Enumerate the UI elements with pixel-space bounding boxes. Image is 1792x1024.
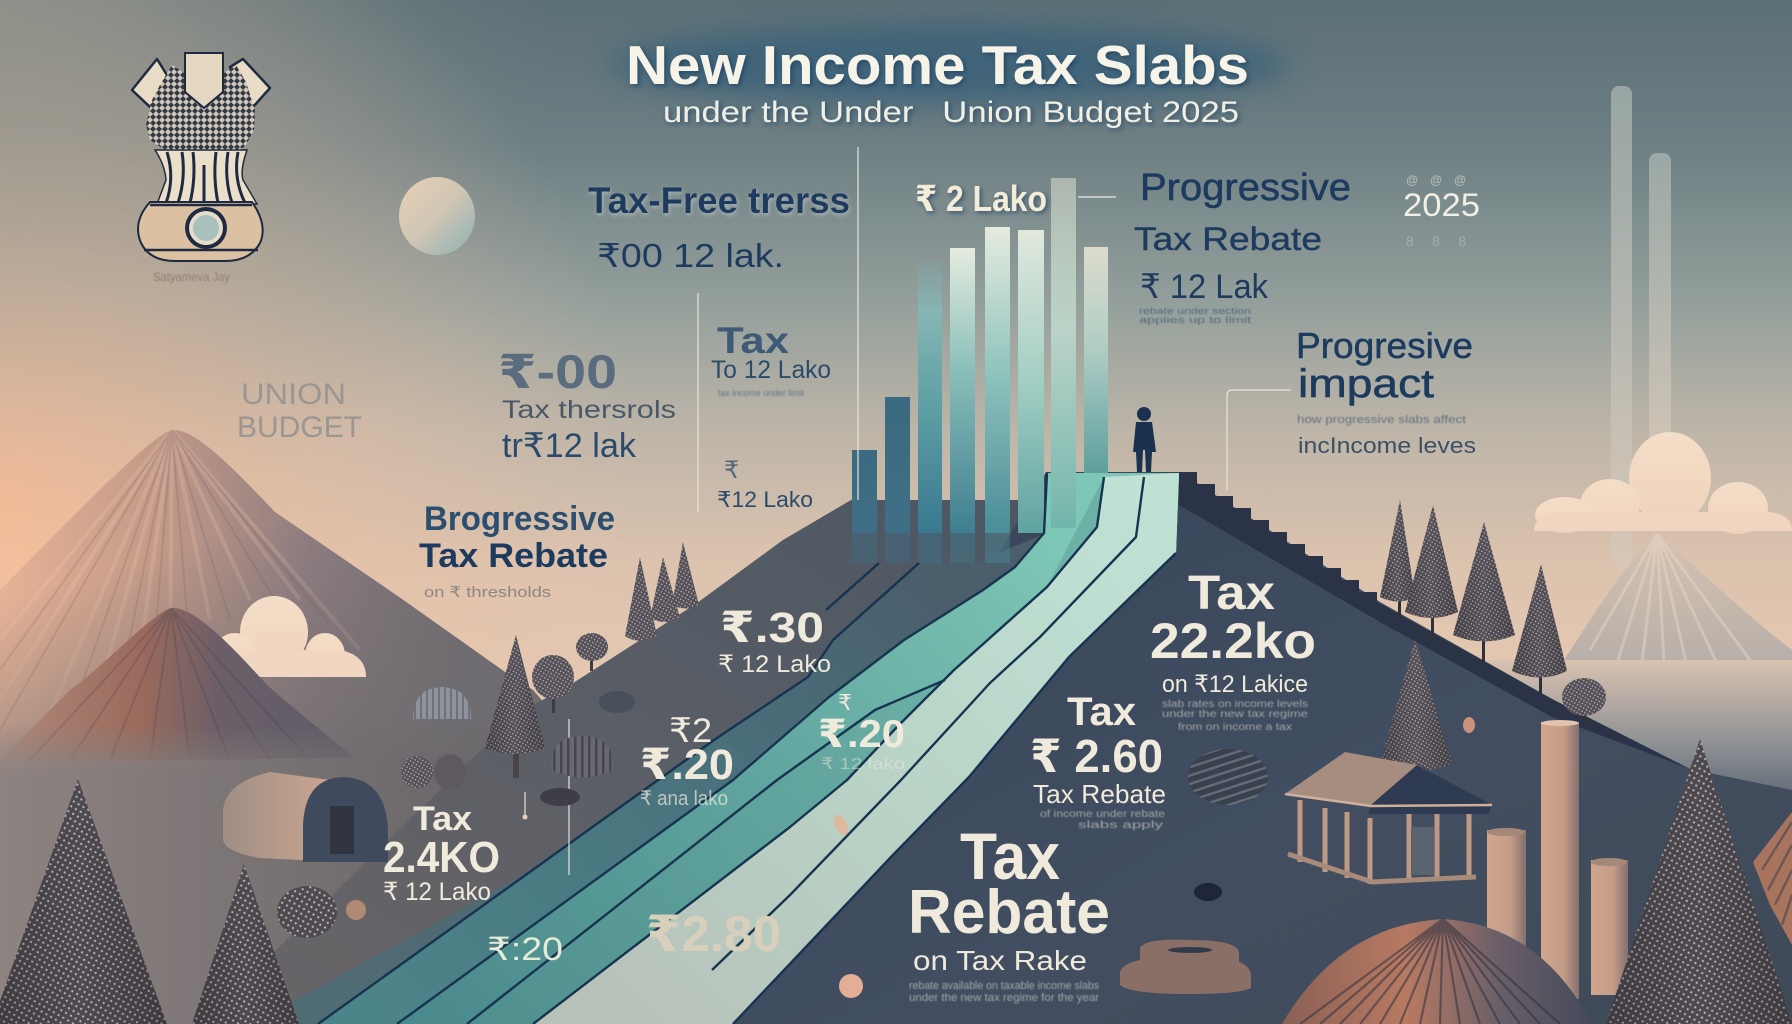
hill label: tax rebate large: rebate available on taxable income slabs: [909, 980, 1099, 992]
cones, house and columns right side: [1120, 500, 1792, 1024]
round bush: [1562, 678, 1606, 722]
ramp label: 2 / 20: ₹2: [669, 712, 712, 750]
hill label: tax rebate large: [908, 819, 1110, 1004]
callout: progressive tax rebate right: ₹ 12 Lak: [1140, 268, 1269, 306]
hill label: tax 22.2ko: from on income a tax: [1178, 722, 1292, 733]
ramp label: 20 right: [818, 690, 905, 773]
staircase on hill ridge: [1179, 472, 1690, 769]
callout: tax-free threshold: Tax-Free trerss: [588, 180, 850, 221]
callout: progressive tax rebate right: [1134, 167, 1351, 325]
tall column: [1541, 720, 1579, 999]
tree 3: [1453, 522, 1515, 662]
callout: tax thresholds: Tax thersrols: [502, 396, 676, 424]
title glow: [610, 25, 1290, 105]
callout: progressive tax rebate right: Tax Rebate: [1134, 221, 1322, 257]
emblem caption: Satyameva Jay: [153, 270, 230, 284]
callout: progressive tax rebate left: Tax Rebate: [419, 537, 608, 575]
hill label: tax 2.60: [1030, 690, 1166, 831]
ground label: tax 2.4ko: Tax: [413, 800, 472, 838]
tax slab ramp: [265, 473, 1179, 1024]
hill label: tax rebate large: Rebate: [908, 878, 1110, 947]
callout: tax to 12 lakh: ₹: [724, 457, 739, 484]
callout: tax-free threshold: ₹00 12 lak.: [597, 237, 784, 274]
bar 7: [1051, 178, 1076, 528]
callout: top bar label: ₹ 2 Lako: [915, 178, 1047, 219]
ball on ramp: [839, 974, 863, 998]
tree cluster upper: [625, 542, 699, 641]
person standing on platform: [1133, 407, 1156, 472]
big right cone: [1606, 739, 1792, 1024]
striped ball: [1188, 749, 1268, 805]
hill label: tax 2.60: slabs apply: [1078, 820, 1163, 831]
medium column: [1487, 828, 1526, 955]
callout: progressive tax rebate left: Brogressive: [424, 500, 615, 538]
ramp label: 2 / 20: ₹.20: [640, 741, 734, 789]
cloud left: [213, 596, 366, 677]
tree 2: [1405, 505, 1458, 642]
callout: tax thresholds: [498, 345, 676, 465]
tree 1: [1380, 500, 1415, 618]
short column: [1591, 858, 1628, 995]
tall cone tree: [485, 635, 545, 778]
big left mountain: [0, 430, 620, 790]
second left cone: [192, 864, 299, 1024]
small ornament: [1194, 883, 1222, 901]
union budget label: [237, 378, 362, 444]
tree 4: [1512, 564, 1567, 694]
stone disc: [1120, 940, 1251, 994]
callout: progressive impact: how progressive slabs affect: [1297, 414, 1466, 426]
ramp band pale: [533, 473, 1179, 1024]
hill label: tax 22.2ko: Tax: [1188, 567, 1275, 620]
year label: 8 8 8: [1406, 233, 1466, 249]
round bushes: [413, 633, 635, 719]
hill label: tax 2.60: ₹ 2.60: [1030, 730, 1163, 782]
hill label: tax rebate large: under the new tax regime for the year: [909, 992, 1099, 1004]
ground label: tax 2.4ko: [383, 800, 500, 906]
callout: progressive impact: incIncome leves: [1298, 433, 1476, 458]
ramp dark lane lines: [318, 473, 1176, 1024]
callout: progressive impact: [1296, 325, 1476, 458]
callout: tax thresholds: ₹-00: [498, 345, 617, 398]
hill label: tax 22.2ko: [1150, 567, 1316, 733]
dome: [1282, 919, 1592, 1024]
left hill slope: [200, 500, 1060, 1024]
callout: progressive tax rebate left: on ₹ thresholds: [424, 584, 551, 601]
ramp label: 2 / 20: ₹ ana lako: [640, 788, 728, 810]
bar 3: [918, 262, 942, 533]
tunnel: [223, 772, 388, 862]
hill label: tax rebate large: on Tax Rake: [913, 945, 1087, 976]
cones and trees left side: [0, 542, 863, 1024]
ramp label: 30: ₹.30: [720, 604, 824, 652]
ramp label: 30: [718, 604, 831, 678]
striped cone edge right: [1753, 812, 1792, 945]
ramp band slate: [265, 473, 1179, 1024]
callout leader lines: [525, 147, 1291, 875]
ground label: tax 2.4ko: 2.4KO: [383, 833, 500, 882]
hill label: tax rebate large: Tax: [960, 819, 1060, 893]
sphere: [399, 177, 475, 255]
ramp label: 20 right: ₹.20: [818, 713, 905, 756]
ramp label: bottom 20: ₹:20: [487, 931, 563, 967]
big left cone: [0, 779, 167, 1024]
callout: progressive tax rebate right: applies up to limit: [1139, 315, 1252, 325]
year label: [1403, 173, 1480, 249]
hill label: tax 2.60: of income under rebate: [1040, 809, 1166, 820]
callout: tax to 12 lakh: Tax: [717, 320, 789, 361]
year label: @ @ @: [1406, 173, 1466, 187]
ground label: tax 2.4ko: ₹ 12 Lako: [383, 878, 491, 906]
year label: 2025: [1403, 187, 1480, 223]
callout: tax to 12 lakh: tax income under limit: [718, 388, 804, 398]
ramp band teal: [397, 473, 1179, 1024]
hill label: tax 22.2ko: 22.2ko: [1150, 613, 1316, 669]
callout: tax thresholds: tr₹12 lak: [502, 427, 637, 465]
callout: progressive tax rebate left: [419, 500, 615, 601]
ramp label: 20 right: ₹: [838, 690, 852, 715]
callout: progressive impact: impact: [1298, 362, 1434, 406]
hill label: tax 22.2ko: slab rates on income levels: [1162, 699, 1308, 710]
ramp band teal lower: [467, 473, 1179, 1024]
title: New Income Tax Slabs: [626, 34, 1249, 96]
cloud right: [1534, 432, 1792, 534]
bar 1: [852, 450, 877, 533]
bar 4: [950, 248, 975, 533]
bottom-left bush: [277, 886, 366, 938]
ramp label: 20 right: ₹ 12 lako: [821, 756, 905, 773]
ramp label: 30: ₹ 12 Lako: [718, 651, 831, 678]
callout: tax to 12 lakh: To 12 Lako: [711, 356, 831, 384]
house: [1285, 752, 1492, 884]
callout: progressive impact: Progresive: [1296, 325, 1473, 366]
callout: tax to 12 lakh: ₹12 Lako: [717, 487, 813, 512]
callout: tax to 12 lakh: [711, 320, 831, 512]
emblem of India: [132, 53, 270, 284]
ramp label: 2 / 20: [640, 712, 734, 810]
bar 5: [985, 227, 1010, 533]
callout: progressive tax rebate right: rebate under section: [1139, 306, 1251, 316]
callout: tax-free threshold: [588, 180, 850, 274]
small capsule: [1463, 717, 1475, 733]
front left mountain: [0, 608, 355, 762]
hill label: tax 2.60: Tax Rebate: [1033, 779, 1166, 809]
ramp label: bottom 2.80: ₹2.80: [646, 906, 781, 962]
union budget label: UNION: [241, 378, 346, 411]
capsule on ramp: [831, 812, 851, 838]
right hill and ground: [731, 472, 1792, 1024]
pale background columns: [1611, 86, 1671, 566]
hill label: tax 22.2ko: on ₹12 Lakice: [1162, 671, 1308, 698]
reflections of bars on hill: [852, 533, 1010, 563]
union budget label: BUDGET: [237, 411, 362, 444]
egg bushes: [401, 736, 613, 820]
bar 6: [1018, 230, 1044, 533]
bar 2: [885, 397, 910, 533]
bar 8: [1084, 247, 1108, 473]
hill label: tax 22.2ko: under the new tax regime: [1162, 709, 1309, 720]
callout: progressive tax rebate right: Progressive: [1140, 167, 1351, 209]
ramp band slate teal: [318, 473, 1179, 1024]
bar chart of tax slabs: [852, 178, 1108, 533]
hill label: tax 2.60: Tax: [1067, 690, 1136, 734]
far mountain right: [1545, 534, 1792, 690]
left ground: [0, 734, 440, 1024]
cone in front of hill: [1380, 639, 1452, 771]
subtitle: under the Under Union Budget 2025: [663, 96, 1239, 129]
